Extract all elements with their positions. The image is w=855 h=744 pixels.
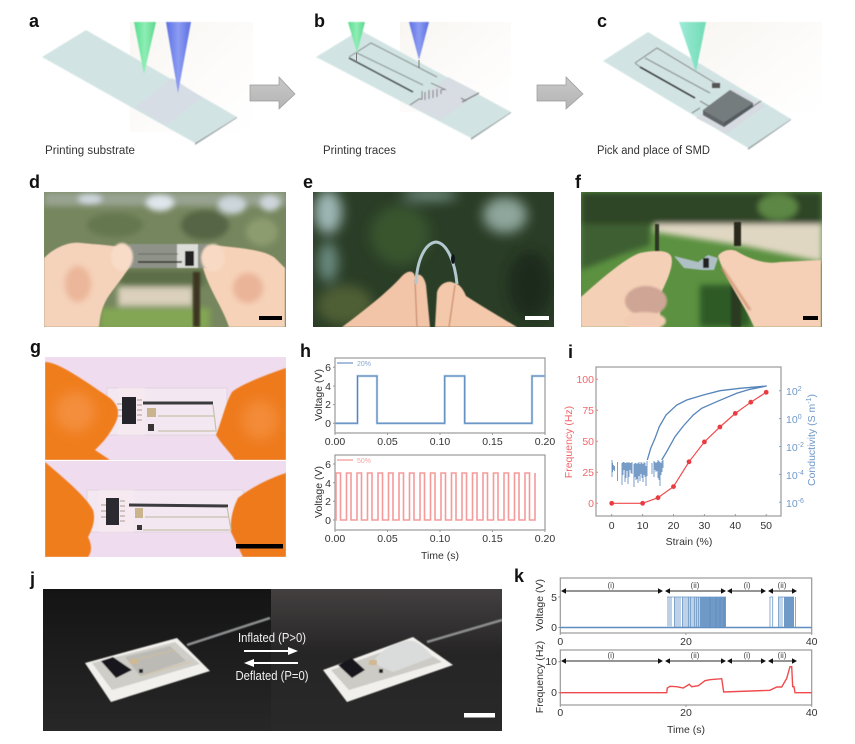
panel label c: c: [597, 11, 607, 31]
panel d: photo of flat device held by hands: [29, 172, 286, 330]
left axis labels: 0: [588, 498, 594, 510]
voltage chart: Voltage (V): [534, 579, 546, 631]
render background: [130, 22, 253, 132]
frequency chart: [534, 641, 818, 719]
chart h 50 percent: 0.15: [482, 533, 503, 545]
blue nozzle: [409, 22, 429, 60]
panel label g: g: [30, 337, 41, 357]
scale bar d: [259, 316, 282, 320]
voltage phase arrows: (i): [743, 581, 751, 590]
right axis labels: -2: [798, 442, 804, 449]
printed traces: [349, 43, 479, 105]
right fingers: [435, 282, 517, 327]
arrow right: [244, 647, 298, 655]
panel e: photo of bent device: [303, 172, 554, 327]
lower finger: [627, 311, 668, 327]
right axis labels: 10: [786, 442, 798, 454]
arrow left: [244, 659, 298, 667]
left axis labels: [576, 374, 594, 510]
left glove: [45, 462, 94, 557]
chart h 20 percent: 6: [325, 362, 331, 374]
right hand: [201, 246, 285, 327]
chart h 50 percent: 4: [325, 478, 331, 490]
left axis labels: 25: [582, 467, 594, 479]
caption b: Printing traces: [323, 145, 396, 157]
voltage phase arrows: (ii): [778, 581, 787, 590]
chart h 50 percent: [313, 455, 555, 545]
chart h 50 percent: 0.10: [430, 533, 450, 545]
x axis title k: Time (s): [667, 724, 705, 736]
chart h 20 percent: 0.20: [535, 436, 555, 448]
x axis labels: [609, 520, 772, 532]
deflated label: Deflated (P=0): [236, 669, 308, 683]
right fingertip: [201, 244, 225, 272]
caption a: Printing substrate: [45, 145, 135, 157]
render background: [700, 22, 822, 112]
resistor: [137, 525, 142, 530]
frequency phase arrows: (i): [607, 651, 615, 660]
blue nozzle: [166, 22, 191, 93]
right axis labels: 0: [798, 414, 802, 421]
right axis labels: 2: [798, 386, 802, 393]
panel c: pick and place of SMD: [597, 11, 822, 157]
right axis labels: 10: [786, 498, 798, 510]
IC pins: [117, 400, 142, 420]
scale bar e: [525, 316, 549, 320]
chart h 20 percent: 0: [325, 418, 331, 430]
chart h 50 percent: 0.05: [377, 533, 398, 545]
left glove: [45, 362, 118, 460]
right axis labels: [786, 386, 804, 510]
right axis labels: 10: [786, 386, 798, 398]
right axis labels: 10: [786, 414, 798, 426]
chart h 20 percent: 0.10: [430, 436, 450, 448]
x axis labels: 10: [637, 520, 649, 532]
panel label i: i: [568, 342, 573, 362]
panel label e: e: [303, 172, 313, 192]
chart h 50 percent: 0.20: [535, 533, 555, 545]
x axis labels: 30: [699, 520, 710, 532]
left axis labels: 100: [576, 374, 594, 386]
chart h 20 percent: 0.00: [325, 436, 345, 448]
left fingertip: [111, 243, 133, 271]
x axis labels: 50: [760, 520, 772, 532]
panel label k: k: [514, 566, 525, 586]
frequency curve with markers: [609, 390, 769, 506]
x axis labels: 0: [609, 520, 615, 532]
panel label j: j: [29, 569, 35, 589]
voltage phase arrows: (i): [607, 581, 615, 590]
chart h 50 percent: Voltage (V): [313, 466, 325, 518]
stretchable device: [129, 244, 209, 268]
right glove: [231, 473, 286, 557]
voltage chart: [534, 578, 818, 648]
x axis labels: 20: [668, 520, 679, 532]
scale bar f: [803, 316, 818, 320]
scale bar j: [464, 713, 495, 718]
silver traces: [143, 507, 231, 530]
voltage chart: 5: [551, 592, 557, 604]
caption c: Pick and place of SMD: [597, 145, 710, 157]
conductivity loop curves: [647, 386, 767, 460]
voltage chart: 40: [806, 636, 818, 648]
frequency axis title: Frequency (Hz): [563, 406, 575, 478]
panel b: printing traces: [314, 11, 511, 157]
panel label d: d: [29, 172, 40, 192]
chart h 50 percent: 6: [325, 459, 331, 471]
conductivity axis title: -1: [806, 397, 813, 404]
scale bar g: [236, 544, 283, 548]
silver traces: [158, 405, 218, 431]
black conductive trace: [143, 402, 213, 404]
panel label f: f: [575, 172, 582, 192]
frequency chart: 0: [551, 687, 557, 699]
frequency chart: 10: [545, 656, 557, 668]
panel h: voltage versus time charts: [300, 341, 555, 562]
panel a: printing substrate: [29, 11, 253, 157]
substrate slab: [42, 30, 237, 145]
bent device arc: [416, 242, 457, 284]
frequency chart: 40: [806, 707, 818, 719]
chart frame and ticks: [596, 367, 781, 516]
voltage phase arrows: [561, 581, 797, 594]
substrate slab: [316, 30, 511, 140]
panel label h: h: [300, 341, 311, 361]
IC chip: [106, 498, 119, 525]
left device, deflated: [85, 638, 210, 702]
frequency phase arrows: (ii): [778, 651, 787, 660]
needle tips: [356, 53, 419, 68]
x axis title h: Time (s): [421, 550, 459, 562]
SMD chip: [703, 90, 753, 127]
photo d: [44, 192, 286, 330]
frequency chart: 20: [680, 707, 692, 719]
voltage chart: 0: [551, 622, 557, 634]
right glove: [216, 368, 286, 460]
photo e: [313, 190, 554, 327]
right hand: [718, 250, 821, 327]
clear elastomer strip: [107, 388, 227, 435]
render background: [400, 22, 511, 112]
frequency chart: 0: [557, 707, 563, 719]
chart h 50 percent: 0: [325, 515, 331, 527]
photo g stretched: [45, 461, 286, 557]
panel label b: b: [314, 11, 325, 31]
right axis labels: -6: [798, 498, 804, 505]
green nozzle: [134, 22, 156, 74]
panel i: frequency and conductivity versus strain: [563, 342, 818, 548]
chart h 20 percent: 4: [325, 381, 331, 393]
voltage chart: 20: [680, 636, 692, 648]
printed traces: [635, 48, 761, 113]
capacitor: [135, 508, 143, 518]
panel k: cyclic voltage and frequency charts: [514, 566, 818, 736]
IC chip: [122, 397, 136, 424]
left axis labels: 50: [582, 436, 594, 448]
chart h 50 percent: 2: [325, 496, 331, 508]
left hand: [581, 251, 672, 327]
panel g: stretch photographs: [30, 337, 286, 557]
conductivity noisy low-strain trace: [612, 460, 663, 487]
left axis labels: 75: [582, 405, 594, 417]
clear elastomer strip: [87, 490, 243, 532]
panel j: soft actuator photograph: [29, 569, 502, 731]
chart h 20 percent: [313, 358, 555, 448]
photo g unstretched: [45, 357, 286, 460]
photo f: [581, 192, 822, 330]
right axis labels: -4: [798, 470, 804, 477]
x axis labels: 40: [729, 520, 741, 532]
panel label a: a: [29, 11, 40, 31]
cables: [187, 618, 502, 645]
left fingers: [342, 272, 430, 327]
resistor: [148, 424, 154, 431]
frequency phase arrows: (i): [743, 651, 751, 660]
capacitor: [147, 408, 156, 417]
arrow b to c: [537, 77, 583, 109]
chart h 20 percent: 0.15: [482, 436, 503, 448]
small component: [712, 83, 720, 88]
black conductive trace: [129, 505, 228, 506]
left hand: [44, 243, 133, 327]
inflated label: Inflated (P>0): [238, 631, 306, 645]
chart h 20 percent: Voltage (V): [313, 369, 325, 421]
green nozzle: [348, 22, 365, 53]
right device, inflated: [323, 637, 453, 702]
chart h 20 percent: 20%: [357, 361, 371, 368]
panel f: photo of twisted device: [575, 172, 822, 330]
chart h 20 percent: 2: [325, 399, 331, 411]
pick and place nozzle: [679, 22, 706, 72]
chart h 50 percent: 0.00: [325, 533, 345, 545]
voltage chart: 0: [557, 636, 563, 648]
conductivity axis title: ): [806, 394, 818, 397]
IC pins: [101, 501, 125, 521]
twisted device: [674, 255, 718, 270]
thumb: [625, 286, 667, 316]
strain axis title: Strain (%): [666, 536, 712, 548]
frequency phase arrows: (ii): [691, 651, 700, 660]
frequency chart: Frequency (Hz): [534, 641, 546, 713]
arrow a to b: [250, 77, 295, 109]
substrate slab: [603, 32, 791, 150]
photo j: [43, 589, 502, 731]
right axis labels: 10: [786, 470, 798, 482]
voltage phase arrows: (ii): [691, 581, 700, 590]
frequency phase arrows: [561, 651, 797, 664]
chart h 20 percent: 0.05: [377, 436, 398, 448]
conductivity axis title: Conductivity (S m: [806, 404, 818, 486]
chart h 50 percent: 50%: [357, 458, 371, 465]
